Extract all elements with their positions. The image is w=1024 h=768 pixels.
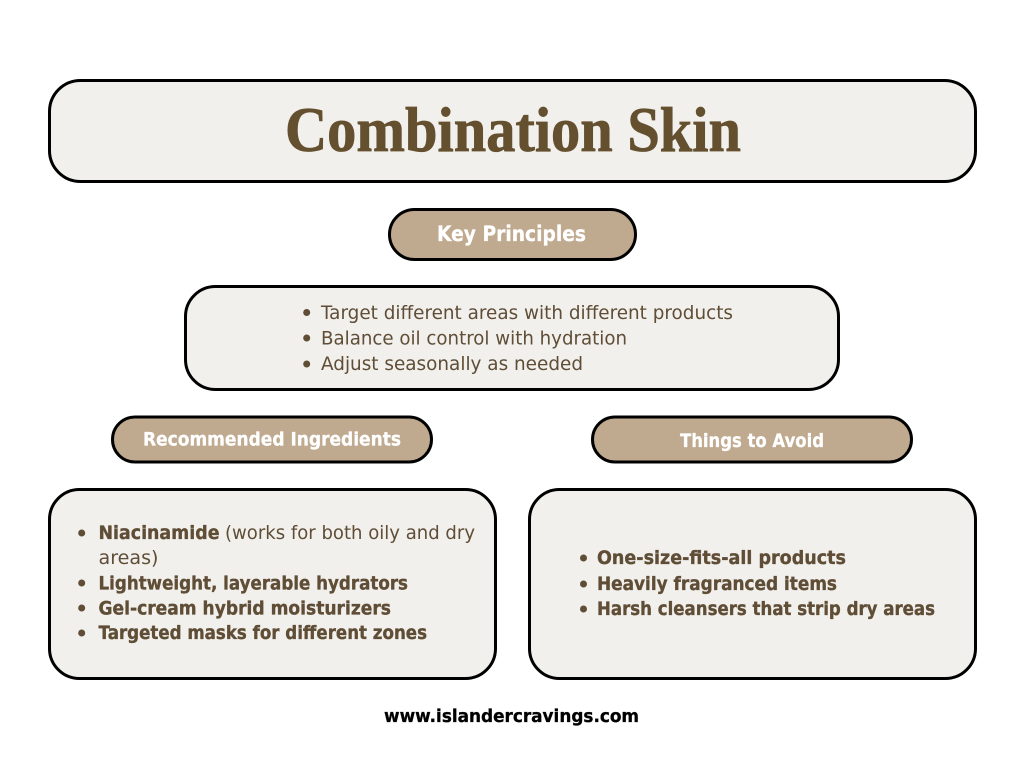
panel: Key Principles pill: Key Principles <box>437 222 586 246</box>
panel: things to avoid list <box>530 490 976 678</box>
panel: recommended ingredients list: areas) <box>98 547 158 569</box>
panel: key principles list: Target different areas with different products <box>320 302 733 324</box>
panel: Things to Avoid pill: Things to Avoid <box>680 430 824 452</box>
panel: recommended ingredients list: Niacinamide <box>98 522 220 544</box>
panel: Things to Avoid pill <box>592 417 912 462</box>
footer: website: www.islandercravings.com <box>384 706 639 727</box>
panel: Key Principles pill <box>390 210 636 260</box>
panel: key principles list: Adjust seasonally as needed <box>321 353 583 375</box>
panel: recommended ingredients list: Lightweight, layerable hydrators <box>98 572 408 594</box>
panel: things to avoid list: Heavily fragranced items <box>597 573 837 595</box>
panel: key principles list <box>186 286 838 390</box>
panel: recommended ingredients list: (works for both oily and dry <box>225 522 475 544</box>
panel: title <box>50 80 976 182</box>
panel: Recommended Ingredients pill: Recommended Ingredients <box>143 428 401 450</box>
heading: Combination Skin: Combination Skin <box>285 95 741 165</box>
panel: recommended ingredients list: Gel-cream hybrid moisturizers <box>98 598 391 620</box>
panel: things to avoid list: One-size-fits-all products <box>597 547 846 569</box>
panel: Recommended Ingredients pill <box>112 417 432 462</box>
panel: recommended ingredients list: Targeted masks for different zones <box>98 622 427 644</box>
panel: recommended ingredients list <box>50 490 496 678</box>
panel: things to avoid list: Harsh cleansers that strip dry areas <box>597 598 935 620</box>
panel: key principles list: Balance oil control with hydration <box>321 328 627 350</box>
